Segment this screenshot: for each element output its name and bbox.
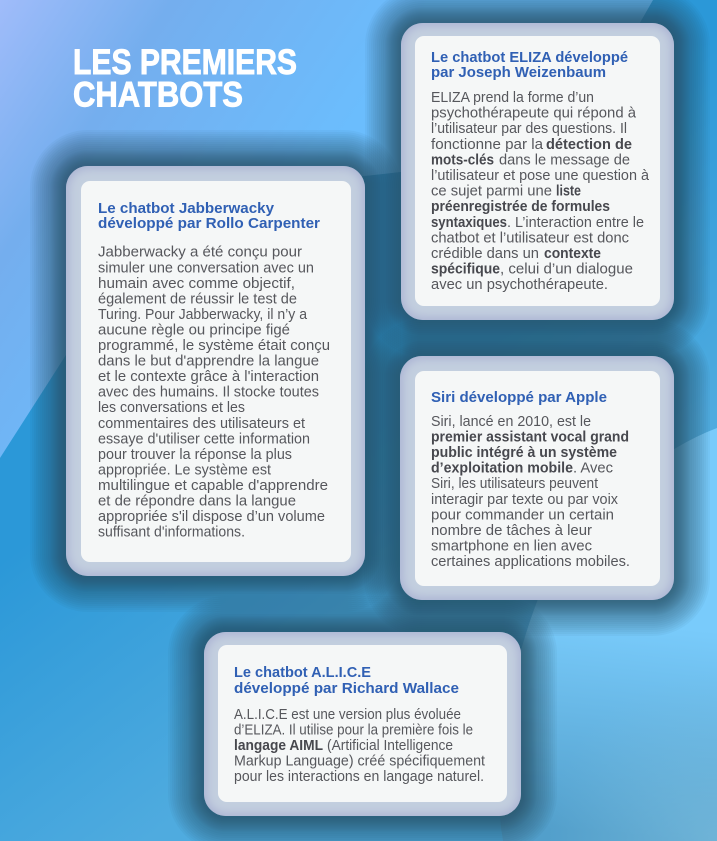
panel: ELIZA: Le chatbot ELIZA développé — [431, 50, 628, 66]
panel: ELIZA: avec un psychothérapeute. — [431, 277, 608, 293]
panel: ELIZA: dans le message de — [499, 152, 630, 168]
panel: Jabberwacky: Jabberwacky a été conçu pour — [98, 245, 302, 261]
panel: ELIZA: ELIZA prend la forme d’un — [431, 90, 594, 106]
panel: Jabberwacky: et de répondre dans la langue — [98, 494, 296, 510]
panel: Siri: smartphone en lien avec — [431, 538, 592, 554]
panel: Jabberwacky: également de réussir le test de — [98, 291, 297, 307]
panel: Jabberwacky: essaye d'utiliser cette information — [98, 431, 310, 447]
panel: ELIZA: détection de — [546, 137, 632, 153]
panel: ALICE: Le chatbot A.L.I.C.E — [234, 665, 371, 681]
panel: Jabberwacky: dans le but d'apprendre la langue — [98, 354, 319, 370]
panel: Jabberwacky: appropriée. Le système est — [98, 462, 271, 478]
panel: ELIZA: par Joseph Weizenbaum — [431, 65, 606, 81]
panel: Jabberwacky: programmé, le système était conçu — [98, 338, 330, 354]
panel: Jabberwacky — [66, 166, 365, 576]
panel: Jabberwacky: avec des humains. Il stocke toutes — [98, 385, 319, 401]
panel: ALICE: Markup Language) créé spécifiquement — [234, 754, 485, 770]
panel: ELIZA: préenregistrée de formules — [431, 199, 610, 215]
panel: ELIZA: chatbot et l’utilisateur est donc — [431, 230, 629, 246]
panel: Siri — [400, 356, 674, 600]
title: CHATBOTS — [73, 76, 243, 114]
panel: Jabberwacky: pour trouver la réponse la plus — [98, 447, 292, 463]
panel: ELIZA: ce sujet parmi une — [431, 184, 552, 200]
panel: ELIZA: spécifique — [431, 262, 500, 278]
panel: Jabberwacky: humain avec comme objectif, — [98, 276, 295, 292]
panel: ELIZA: . L’interaction entre le — [507, 215, 644, 231]
panel: Jabberwacky: Le chatbot Jabberwacky — [98, 201, 274, 217]
panel: ELIZA: psychothérapeute qui répond à — [431, 106, 637, 122]
panel: Siri: nombre de tâches à leur — [431, 523, 592, 539]
panel: Siri: . Avec — [573, 461, 613, 477]
panel: Jabberwacky: aucune règle ou principe figé — [98, 322, 290, 338]
panel: Jabberwacky: appropriée s'il dispose d’un volume — [98, 509, 325, 525]
panel: Siri: premier assistant vocal grand — [431, 430, 629, 446]
panel: ELIZA: mots-clés — [431, 152, 494, 168]
panel: ALICE: (Artificial Intelligence — [327, 738, 453, 754]
panel: ALICE — [204, 632, 521, 816]
panel: Jabberwacky: les conversations et les — [98, 400, 245, 416]
panel: ELIZA: syntaxiques — [431, 215, 507, 231]
panel: ALICE: développé par Richard Wallace — [234, 681, 459, 697]
panel: Siri: d’exploitation mobile — [431, 461, 573, 477]
panel: Jabberwacky: suffisant d'informations. — [98, 525, 245, 541]
panel: Siri: certaines applications mobiles. — [431, 554, 630, 570]
panel: ELIZA — [401, 23, 674, 320]
panel: Siri: public intégré à un système — [431, 445, 617, 461]
panel: Jabberwacky: développé par Rollo Carpenter — [98, 216, 320, 232]
panel: ELIZA: contexte — [544, 246, 601, 262]
panel: Jabberwacky: commentaires des utilisateurs et — [98, 416, 305, 432]
panel: ELIZA: crédible dans un — [431, 246, 539, 262]
panel: Siri: Siri, lancé en 2010, est le — [431, 414, 591, 430]
panel: Jabberwacky: multilingue et capable d'apprendre — [98, 478, 328, 494]
panel: ALICE: d’ELIZA. Il utilise pour la première fois le — [234, 722, 473, 738]
panel: ELIZA: liste — [556, 184, 581, 200]
panel: Siri: Siri, les utilisateurs peuvent — [431, 476, 598, 492]
panel: Siri: Siri développé par Apple — [431, 390, 607, 406]
title — [73, 43, 297, 114]
panel: Jabberwacky: simuler une conversation avec un — [98, 260, 314, 276]
panel: ALICE: A.L.I.C.E est une version plus évoluée — [234, 707, 461, 723]
panel: Jabberwacky: Turing. Pour Jabberwacky, il n’y a — [98, 307, 308, 323]
panel: ELIZA: l’utilisateur et pose une question à — [431, 168, 650, 184]
title: LES PREMIERS — [73, 43, 297, 82]
panel: ALICE: pour les interactions en langage naturel. — [234, 769, 484, 785]
panel: Siri: interagir par texte ou par voix — [431, 492, 619, 508]
panel: Siri: pour commander un certain — [431, 507, 614, 523]
panel: ELIZA: fonctionne par la — [431, 137, 544, 153]
panel: ALICE: langage AIML — [234, 738, 323, 754]
panel: ELIZA: l’utilisateur par des questions. Il — [431, 121, 627, 137]
panel: Jabberwacky: et le contexte grâce à l'interaction — [98, 369, 319, 385]
panel: ELIZA: , celui d’un dialogue — [500, 262, 633, 278]
